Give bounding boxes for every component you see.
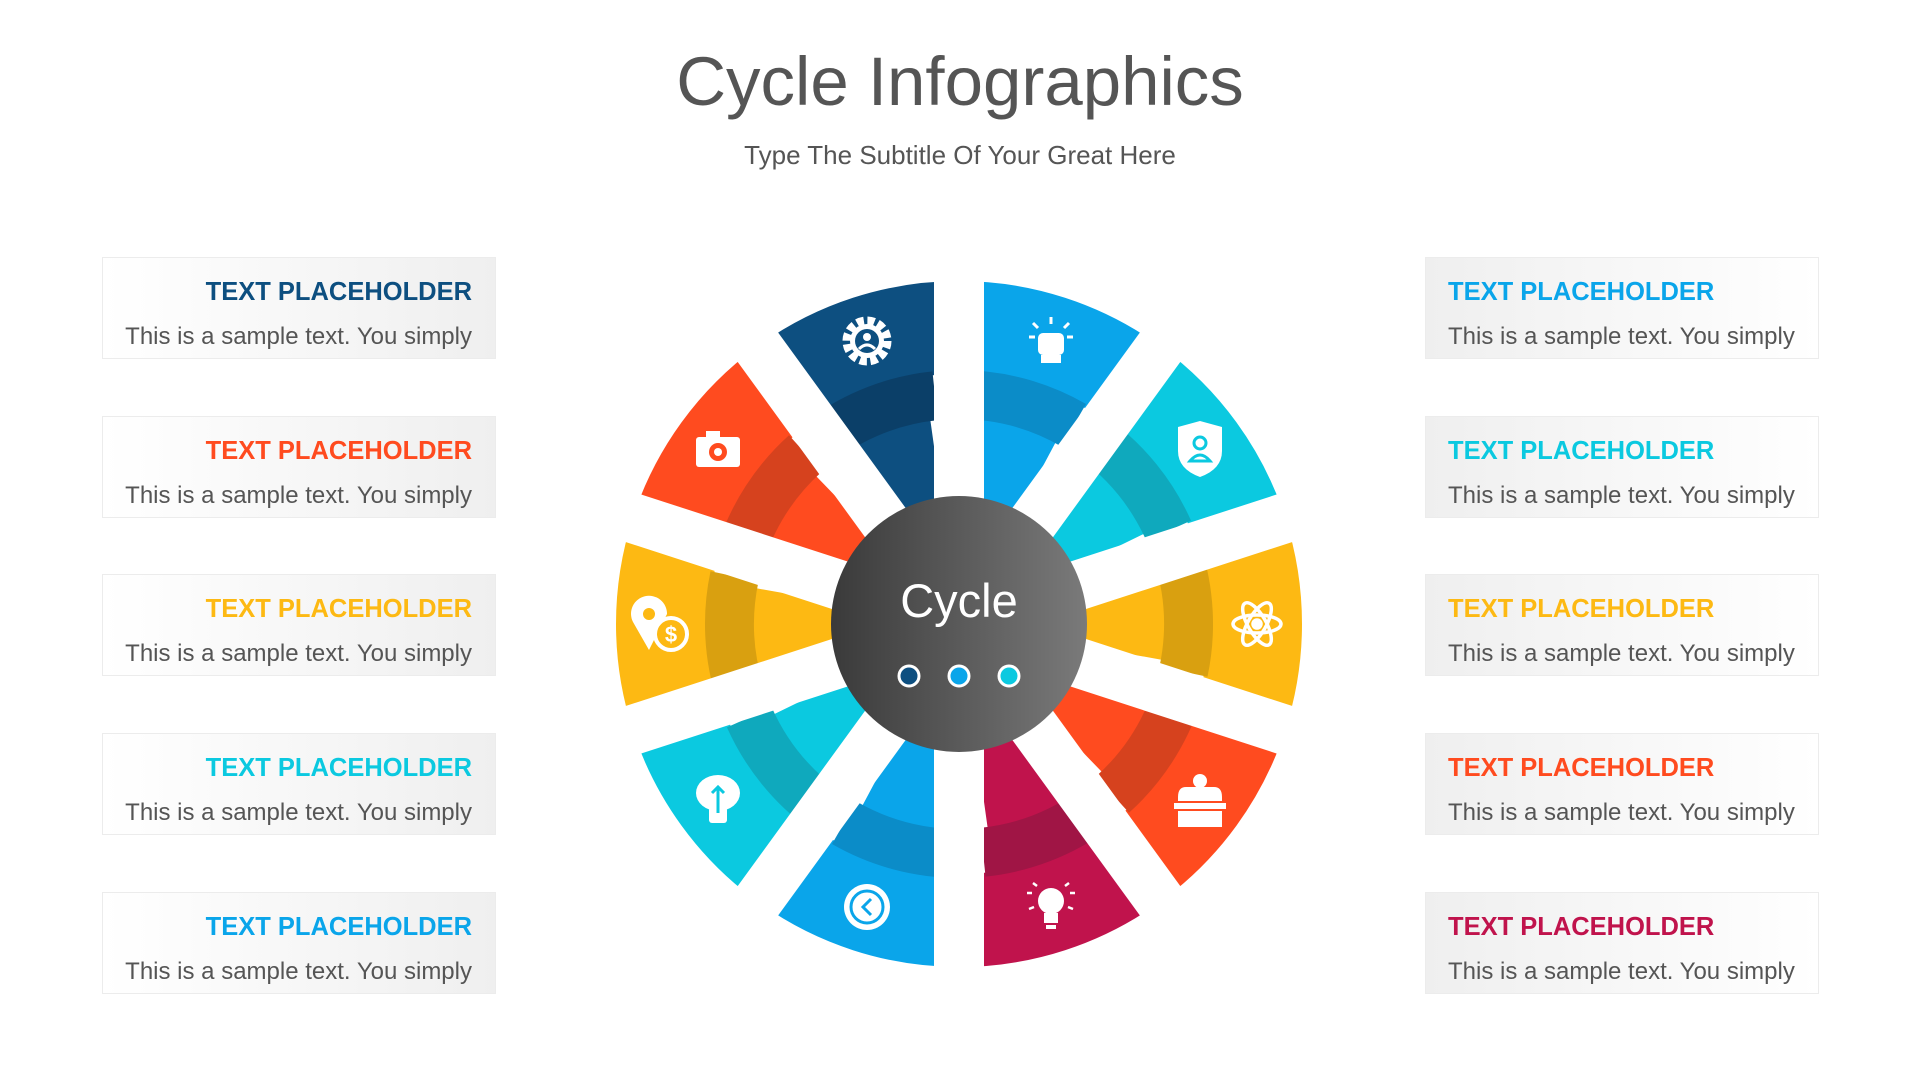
right box 4 xyxy=(1425,733,1819,835)
icon: clock xyxy=(844,884,890,930)
left box 2: This is a sample text. You simply xyxy=(125,482,472,509)
segment 2 cyan xyxy=(1021,347,1324,657)
center circle xyxy=(831,496,1087,752)
icon: atom xyxy=(1233,599,1281,649)
left box 1: This is a sample text. You simply xyxy=(125,323,472,350)
left box 2: TEXT PLACEHOLDER xyxy=(206,437,472,465)
left box 3: TEXT PLACEHOLDER xyxy=(206,595,472,623)
segment 3 yellow xyxy=(1060,518,1348,783)
segment 6 blue xyxy=(757,730,959,967)
segment 1 blue xyxy=(959,281,1161,518)
icon: gear xyxy=(847,321,887,361)
left box 4: This is a sample text. You simply xyxy=(125,799,472,826)
left box 3 xyxy=(102,574,496,676)
right box 5 xyxy=(1425,892,1819,994)
icon: shield xyxy=(1178,421,1222,477)
icon: fist xyxy=(1029,317,1073,363)
left box 5: TEXT PLACEHOLDER xyxy=(206,913,472,941)
right box 2: TEXT PLACEHOLDER xyxy=(1448,437,1714,465)
segment 8 yellow xyxy=(570,465,858,730)
right box 1: This is a sample text. You simply xyxy=(1448,323,1795,350)
left box 2 xyxy=(102,416,496,518)
right box 3: This is a sample text. You simply xyxy=(1448,640,1795,667)
left box 4: TEXT PLACEHOLDER xyxy=(206,754,472,782)
right box 4: TEXT PLACEHOLDER xyxy=(1448,754,1714,782)
right box 1 xyxy=(1425,257,1819,359)
icon: money pin: $ xyxy=(665,622,677,647)
title: Cycle Infographics xyxy=(676,43,1244,120)
left box 4 xyxy=(102,733,496,835)
right box 1: TEXT PLACEHOLDER xyxy=(1448,278,1714,306)
right box 3 xyxy=(1425,574,1819,676)
left box 1: TEXT PLACEHOLDER xyxy=(206,278,472,306)
right box 5: TEXT PLACEHOLDER xyxy=(1448,913,1714,941)
segment 7 cyan xyxy=(594,591,897,901)
subtitle: Type The Subtitle Of Your Great Here xyxy=(744,140,1176,170)
icon: podium xyxy=(1174,774,1226,827)
segment 9 orange xyxy=(633,326,920,591)
right box 4: This is a sample text. You simply xyxy=(1448,799,1795,826)
icon: camera xyxy=(696,431,740,467)
right box 3: TEXT PLACEHOLDER xyxy=(1448,595,1714,623)
icon: money pin xyxy=(631,596,687,650)
left box 5 xyxy=(102,892,496,994)
left box 3: This is a sample text. You simply xyxy=(125,640,472,667)
icon: bulb xyxy=(1027,883,1075,929)
segment 5 crimson xyxy=(858,710,1161,1020)
left box 5: This is a sample text. You simply xyxy=(125,958,472,985)
right box 2 xyxy=(1425,416,1819,518)
icon: brain xyxy=(696,775,740,823)
right box 2: This is a sample text. You simply xyxy=(1448,482,1795,509)
segment 10 navy xyxy=(757,228,1060,538)
left box 1 xyxy=(102,257,496,359)
right box 5: This is a sample text. You simply xyxy=(1448,958,1795,985)
segment 4 orange xyxy=(998,657,1285,922)
center circle: Cycle xyxy=(900,574,1018,627)
